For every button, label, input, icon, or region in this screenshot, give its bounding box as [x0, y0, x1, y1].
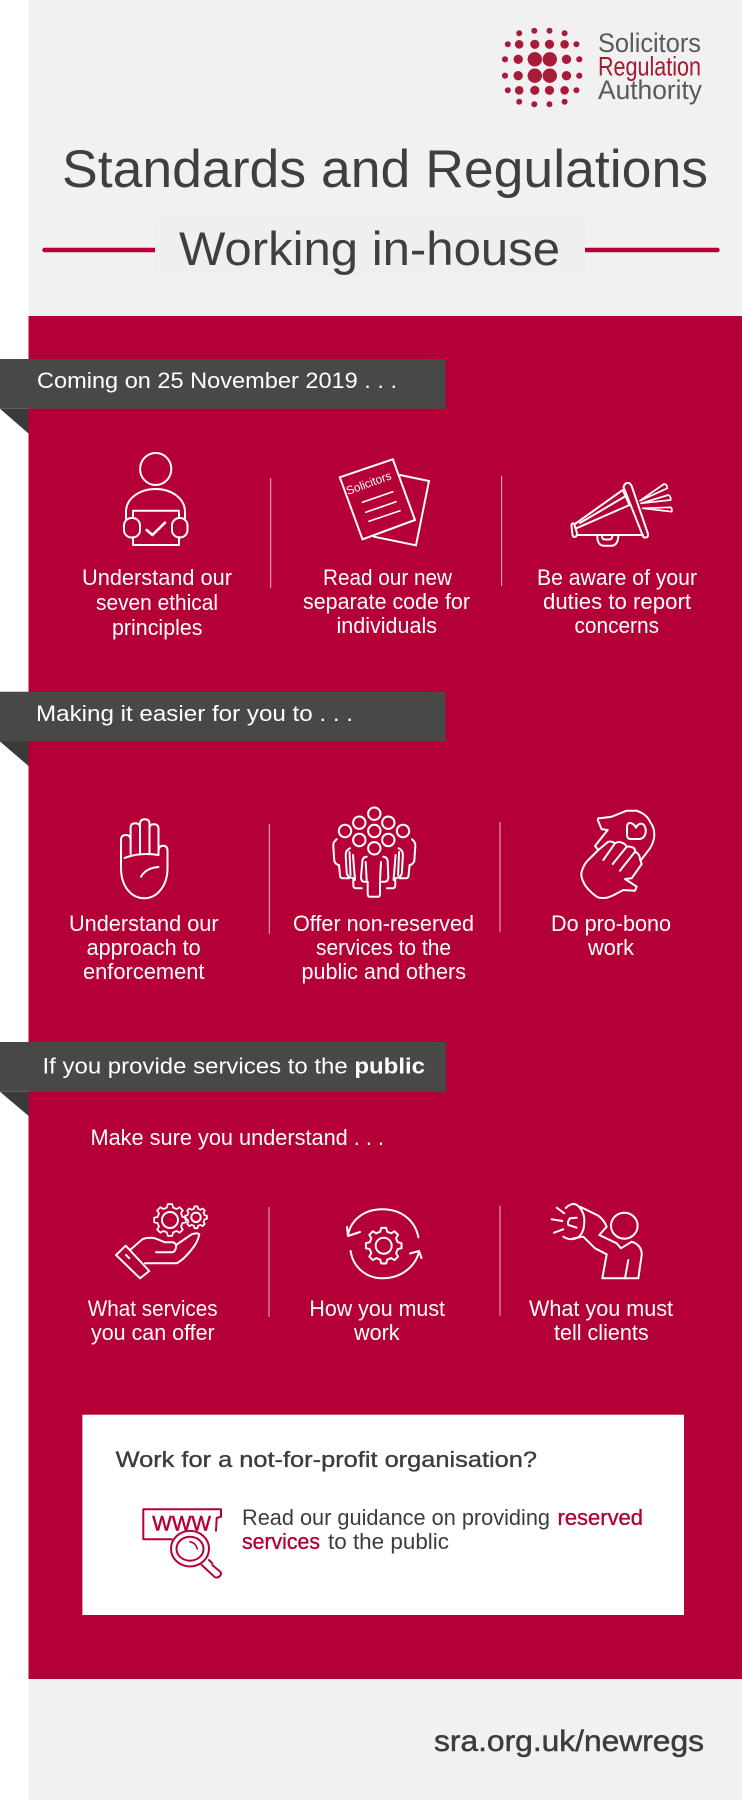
text: non-reserved services: Offer non-reserved	[293, 911, 474, 936]
logo	[502, 28, 702, 107]
text: non-reserved services	[293, 911, 474, 984]
icon: www magnifier	[143, 1509, 221, 1577]
text: what services: What services	[88, 1296, 218, 1321]
text: what you must tell clients: tell clients	[554, 1320, 649, 1345]
logo wordmark: Authority	[598, 75, 702, 105]
text: separate code: Read our new	[323, 565, 452, 590]
text: separate code	[303, 565, 470, 638]
section banner: making it easier	[0, 692, 446, 766]
icon: solicitors code documents	[340, 459, 429, 545]
text: what services	[88, 1296, 218, 1345]
icon: megaphone	[571, 483, 672, 546]
text: pro-bono	[551, 911, 671, 960]
text: ethical principles: seven ethical	[96, 590, 218, 615]
panel: not-for-profit callout	[82, 1415, 684, 1615]
icon: crowd of people	[333, 808, 415, 897]
callout body text: services	[242, 1529, 320, 1554]
icon: person with loudhailer	[552, 1204, 642, 1278]
text: what you must tell clients: What you must	[529, 1296, 673, 1321]
section banner: public	[0, 1042, 446, 1116]
text: separate code: individuals	[336, 613, 437, 638]
footer url: sra.org.uk/newregs	[434, 1725, 704, 1758]
icon: hand with heart	[581, 811, 654, 898]
text: what you must tell clients	[529, 1296, 673, 1345]
section banner: coming	[0, 359, 446, 434]
callout heading: Work for a not-for-profit organisation?	[116, 1447, 537, 1472]
text: make sure you understand: Make sure you understand . . .	[90, 1125, 384, 1150]
text: ethical principles: Understand our	[82, 565, 232, 590]
section banner: making it easier: Making it easier for you to . . .	[36, 701, 353, 726]
text: report concerns: concerns	[574, 613, 659, 638]
panel: main red	[28, 316, 742, 1679]
logo wordmark: Regulation	[598, 52, 701, 82]
subtitle: Working in-house	[179, 222, 560, 275]
icon: www magnifier: WWW	[152, 1513, 211, 1536]
callout body text: Read our guidance on providing	[242, 1505, 550, 1530]
section banner: coming: Coming on 25 November 2019 . . .	[37, 368, 397, 393]
callout body text: reserved	[558, 1505, 643, 1530]
text: separate code: separate code for	[303, 589, 470, 614]
logo dots	[502, 28, 582, 107]
logo wordmark: Solicitors	[598, 28, 701, 58]
title: Standards and Regulations	[62, 140, 708, 199]
icon: hand offering gears	[116, 1204, 207, 1278]
text: enforcement: enforcement	[83, 959, 204, 984]
icon label: Solicitors	[344, 469, 393, 498]
icon: raised hand	[121, 819, 168, 898]
subtitle rules	[44, 248, 718, 252]
text: how you must work: How you must	[309, 1296, 445, 1321]
panel: header	[28, 0, 742, 316]
text: enforcement: Understand our	[69, 911, 219, 936]
text: report concerns: duties to report	[543, 589, 691, 614]
text: how you must work	[309, 1296, 445, 1345]
text: enforcement: approach to	[87, 935, 201, 960]
icon: person holding checked box	[124, 453, 188, 545]
text: pro-bono: Do pro-bono	[551, 911, 671, 936]
panel: footer	[28, 1679, 742, 1800]
text: non-reserved services: services to the	[316, 935, 451, 960]
text: ethical principles: principles	[112, 615, 202, 640]
text: ethical principles	[82, 565, 232, 640]
icon: gear with cycle arrows	[347, 1209, 422, 1278]
callout body text	[242, 1505, 643, 1554]
text: what services: you can offer	[91, 1320, 215, 1345]
section banner: public: If you provide services to the public	[42, 1053, 425, 1078]
text: how you must work: work	[353, 1320, 401, 1345]
logo wordmark	[598, 28, 702, 105]
text: non-reserved services: public and others	[302, 959, 466, 984]
text: report concerns	[537, 565, 697, 638]
text: enforcement	[69, 911, 219, 984]
callout body text: to the public	[328, 1529, 449, 1554]
text: report concerns: Be aware of your	[537, 565, 697, 590]
text: pro-bono: work	[587, 935, 635, 960]
